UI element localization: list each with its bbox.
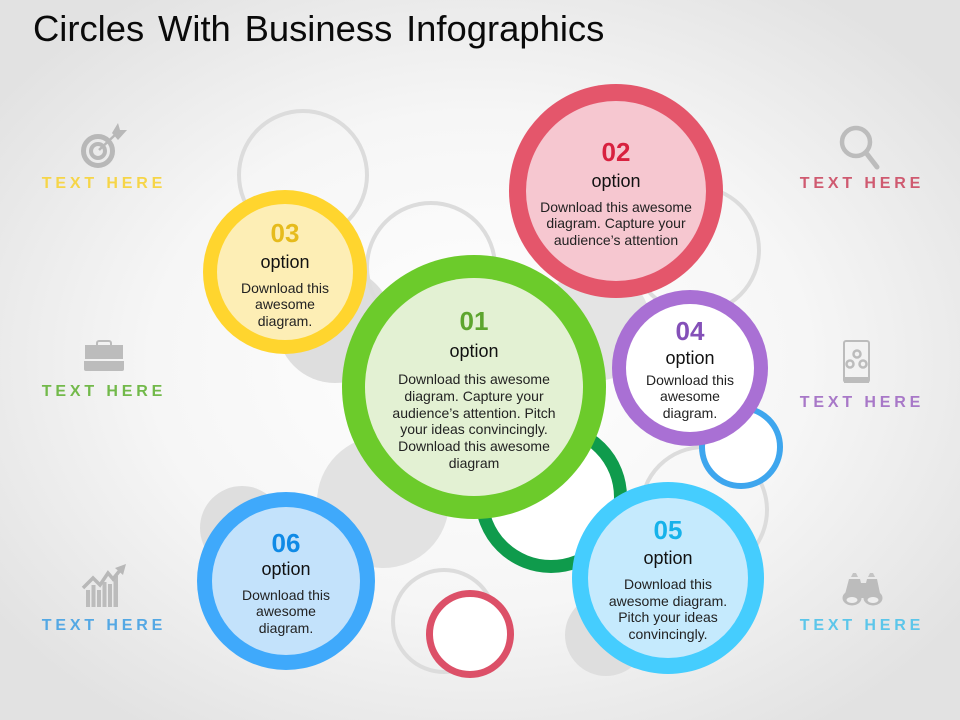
blue ring [702, 408, 780, 486]
circle 03: awesome [255, 296, 315, 312]
circle 06: diagram. [259, 620, 313, 636]
red ring [430, 594, 510, 674]
icon: magnifier [842, 128, 877, 167]
circle 06 [197, 492, 375, 670]
icon: target [84, 123, 127, 166]
circle 02 [509, 84, 723, 298]
label: growth chart: TEXT HERE [42, 617, 166, 634]
label: binoculars: TEXT HERE [800, 617, 924, 634]
circle 06: option [261, 559, 311, 579]
icon: mobile [844, 341, 869, 383]
circle 01: audience’s attention. Pitch [392, 405, 556, 421]
circle 03: 03 [271, 218, 299, 248]
circle 05: 05 [654, 515, 682, 545]
circle 01: Download this awesome [398, 438, 550, 454]
circle 03 [203, 190, 367, 354]
circle 01: your ideas convincingly. [400, 421, 548, 437]
circle 02: option [591, 171, 641, 191]
circle 03: Download this [241, 280, 329, 296]
circle 06: Download this [242, 587, 330, 603]
circle 04: 04 [676, 316, 705, 346]
decorative background circles [200, 111, 767, 676]
circle 04: awesome [660, 388, 720, 404]
circle 01 [342, 255, 606, 519]
label: magnifier: TEXT HERE [800, 175, 924, 192]
circle 03: diagram. [258, 313, 312, 329]
circle 05: Pitch your ideas [618, 609, 718, 625]
icon: briefcase [84, 341, 124, 371]
circle 01: Download this awesome [398, 371, 550, 387]
dark green ring [482, 428, 620, 566]
circle 02: audience’s attention [554, 232, 678, 248]
circle 04: Download this [646, 372, 734, 388]
circle 01: 01 [460, 306, 488, 336]
circle 02: Download this awesome [540, 199, 692, 215]
circle 01: option [449, 341, 499, 361]
title: Circles With Business Infographics [33, 8, 604, 49]
label: mobile: TEXT HERE [800, 394, 924, 411]
circle 01: diagram [449, 455, 499, 471]
label: target: TEXT HERE [42, 175, 166, 192]
circle 06: awesome [256, 603, 316, 619]
circle 05 [572, 482, 764, 674]
circle 05: awesome diagram. [609, 593, 727, 609]
circle 04: diagram. [663, 405, 717, 421]
circle 02: 02 [602, 137, 630, 167]
circle 01: diagram. Capture your [404, 388, 544, 404]
circle 03: option [260, 252, 310, 272]
circle 05: Download this [624, 576, 712, 592]
icon: growth chart [83, 564, 126, 607]
circle 05: convincingly. [628, 626, 708, 642]
icon: binoculars [842, 573, 882, 606]
circle 04 [612, 290, 768, 446]
circle 06: 06 [272, 528, 300, 558]
label: briefcase: TEXT HERE [42, 383, 166, 400]
circle 04: option [665, 348, 715, 368]
circle 02: diagram. Capture your [546, 215, 686, 231]
circle 05: option [643, 548, 693, 568]
